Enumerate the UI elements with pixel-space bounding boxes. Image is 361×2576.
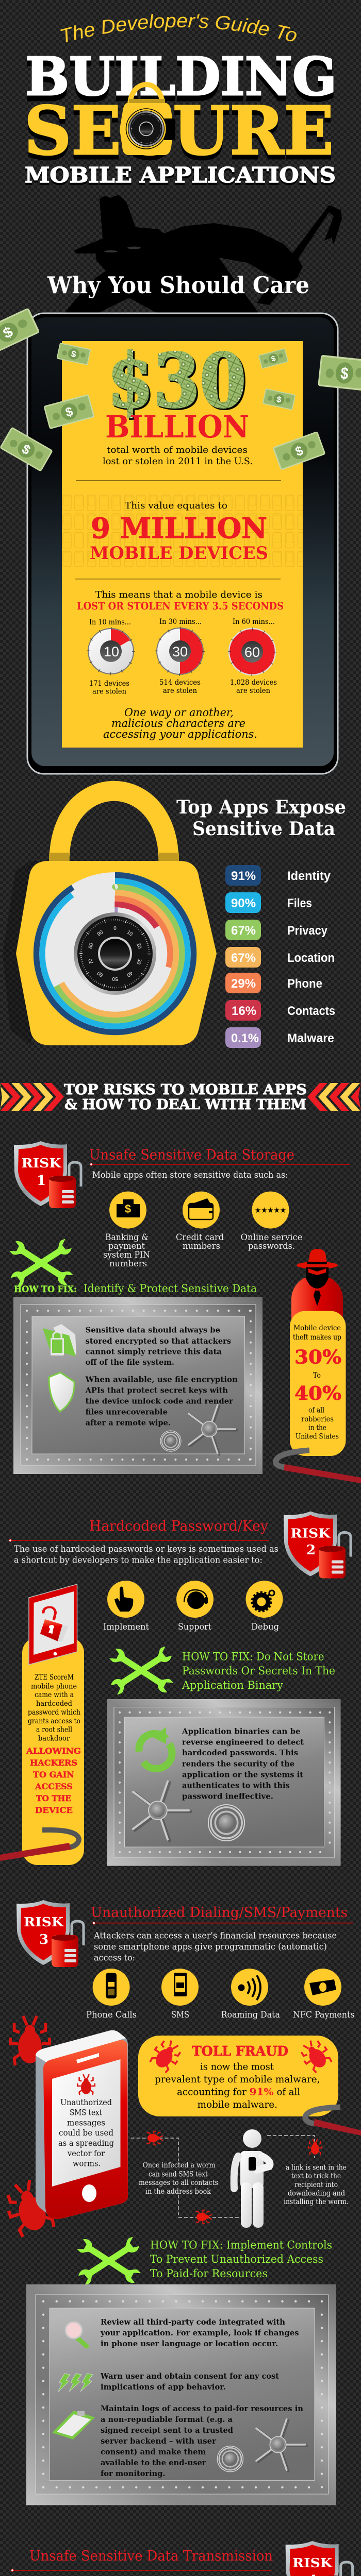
text: vault 3: signed receipt sent to a trusted	[101, 2426, 233, 2435]
flying bills: $	[70, 349, 77, 360]
text: unauthorized sms	[58, 2097, 114, 2168]
text: vault 3: Review all third-party code integrated with	[101, 2317, 285, 2327]
banner title	[64, 1082, 307, 1113]
chevrons right	[307, 1083, 361, 1111]
heading: how to fix 1	[14, 1282, 257, 1295]
chart: big padlock radial chart: 70	[88, 958, 95, 965]
text: allowing hackers: ALLOWING	[26, 1746, 81, 1756]
icon: big bugs	[2, 2016, 59, 2239]
heading: how to fix 3: HOW TO FIX: Implement Controls	[150, 2239, 332, 2251]
text: vault 3: for monitoring.	[101, 2469, 165, 2478]
panel: vault door 2	[107, 1699, 341, 1866]
icon: vault dial	[208, 1805, 244, 1841]
callout: toll fraud	[138, 2036, 338, 2116]
text: allowing hackers: TO GAIN	[33, 1770, 74, 1780]
heading: how to fix 3	[150, 2239, 332, 2280]
text: vault 3: Warn user and obtain consent for any cost	[100, 2371, 279, 2381]
text: a link is sent: text to trick the	[291, 2172, 341, 2180]
heading: risk 3: Unauthorized Dialing/SMS/Payments	[91, 1905, 348, 1921]
callout: theft stat: theft makes up	[293, 1333, 341, 1342]
text: lost or stolen: LOST OR STOLEN EVERY 3.5 SECONDS	[77, 600, 284, 612]
icon: bug on screen	[77, 2074, 95, 2095]
text: total worth: total worth of mobile devices	[107, 445, 248, 455]
title: The Developer's Guide To: The Developer's Guide To	[60, 13, 297, 42]
icon: banking	[109, 1192, 146, 1229]
chart: big padlock radial chart: 60	[96, 970, 104, 978]
chart: big padlock radial chart: 80	[88, 942, 95, 950]
badge: risk 3	[17, 1900, 84, 1967]
banner title: TOP RISKS TO MOBILE APPS	[64, 1082, 307, 1098]
label: credit card: Credit card	[176, 1232, 224, 1242]
badge: risk 1	[14, 1141, 81, 1208]
callout: toll fraud: prevalent type of mobile malware,	[155, 2074, 320, 2085]
label: credit card: numbers	[183, 1241, 220, 1251]
text: unauthorized sms: vector for	[67, 2148, 105, 2158]
number: 9 million: 9 MILLION	[91, 512, 267, 545]
icon: wrenches	[76, 2236, 141, 2286]
callout: toll fraud: accounting for	[177, 2087, 247, 2098]
timer: 60 minutes: 60	[244, 645, 260, 660]
title: Mobile Applications: MOBILE APPLICATIONS	[25, 163, 336, 188]
timer: 10 minutes: 10	[104, 644, 119, 659]
flying bills: $	[340, 364, 349, 383]
callout: ZTE backdoor	[0, 1584, 84, 1865]
labels: implement support debug: Support	[178, 1622, 211, 1632]
callout: toll fraud: is now the most	[200, 2061, 274, 2072]
text: allowing hackers	[26, 1746, 81, 1815]
labels: implement support debug	[103, 1622, 279, 1632]
text: ZTE: backdoor	[38, 1734, 70, 1742]
text: This value equates to: This value equates to	[125, 500, 227, 511]
panel: big red phone	[36, 2030, 128, 2219]
text: vault 3: in phone user language or location occur.	[101, 2339, 278, 2348]
text: vault 2: Application binaries can be	[182, 1726, 301, 1736]
title: Building: BUILDING	[25, 46, 337, 107]
icon: crowbar 1	[276, 1450, 361, 1483]
text: vault 3: available to the end-user	[101, 2458, 207, 2467]
icon: small bugs	[146, 2131, 322, 2224]
risk 3 section	[2, 1900, 361, 2505]
callout: toll fraud: TOLL FRAUD	[192, 2044, 288, 2059]
callout: theft stat: Mobile device	[293, 1324, 341, 1332]
chart: big padlock radial chart: 30	[135, 958, 142, 965]
badge: risk 3: 3	[39, 1932, 48, 1947]
text: ZTE	[28, 1673, 80, 1742]
label: online passwords: passwords.	[248, 1241, 295, 1251]
callout: toll fraud: mobile malware.	[198, 2099, 277, 2110]
text: a link is sent: recipient into	[294, 2181, 338, 2189]
heading: risk 1: Unsafe Sensitive Data Storage	[89, 1147, 294, 1163]
text: this means: This means that a mobile device is	[95, 589, 262, 600]
text: vault 2: renders the security of the	[182, 1759, 294, 1769]
text: a link is sent	[284, 2163, 349, 2206]
labels: access types: Phone Calls	[86, 2010, 137, 2020]
text: vault 1: files unrecoverable	[86, 1408, 168, 1417]
padlock body	[16, 861, 217, 1045]
icon: nfc payments	[304, 1969, 341, 2006]
label: online passwords: Online service	[240, 1232, 302, 1242]
flying bills: $	[276, 395, 282, 405]
callout: theft stat: 30%	[294, 1347, 341, 1368]
text: a link is sent: downloading and	[288, 2190, 345, 2198]
icon: green folder	[43, 1324, 76, 1357]
text: vault 3: implications of app behavior.	[101, 2382, 226, 2392]
labels: access types	[86, 2010, 355, 2020]
heading: Top Apps Expose Sensitive Data	[176, 796, 346, 840]
icon: wrenches	[109, 1646, 174, 1696]
heading: Why You Should Care: Why You Should Care	[47, 272, 309, 299]
text: one way or another: malicious characters are	[111, 717, 245, 730]
icon: credit card	[183, 1192, 220, 1229]
text: unauthorized sms: as a spreading	[58, 2138, 114, 2148]
phone glass	[31, 317, 334, 766]
text: vault 1: stored encrypted so that attackers	[86, 1336, 231, 1346]
text: one way or another: One way or another,	[124, 706, 234, 719]
text: vault 1: When available, use file encryption	[85, 1375, 238, 1384]
icon: green shield	[49, 1372, 74, 1412]
text: one way or another: accessing your applications.	[103, 728, 257, 740]
icon: sms	[161, 1969, 199, 2006]
callout: toll fraud: of all	[277, 2087, 300, 2098]
panel: vault door 1	[13, 1297, 262, 1474]
text: risk 1 intro: Mobile apps often store sensitive data such as:	[92, 1170, 288, 1180]
text: a link is sent: installing the worm.	[284, 2198, 349, 2206]
icon: phone calls	[93, 1969, 130, 2006]
text: unauthorized sms: messages	[67, 2118, 105, 2128]
legend: Malware	[287, 1031, 334, 1045]
text: ZTE: ZTE ScoreM	[35, 1673, 74, 1682]
badge: risk 2	[284, 1512, 351, 1579]
heading: how to fix 2: Passwords Or Secrets In The	[182, 1665, 335, 1677]
chart: big padlock radial chart: 10	[126, 929, 134, 938]
text: ZTE: grants access to	[28, 1717, 80, 1725]
thief silhouette	[64, 195, 342, 313]
text: unauthorized sms: worms.	[73, 2159, 101, 2168]
phones pattern	[62, 495, 303, 567]
text: ZTE: hardcoded	[36, 1700, 72, 1708]
chart: big padlock radial chart	[3, 791, 217, 1045]
label: banking: system PIN	[103, 1250, 150, 1260]
text: ZTE: a root shell	[36, 1726, 72, 1734]
timer: 30 minutes: 30	[172, 644, 188, 659]
callout: theft stat: in the	[308, 1424, 326, 1432]
timer: 30 minutes	[157, 618, 203, 695]
text: once infected: Once infected a worm	[142, 2161, 216, 2170]
text: allowing hackers: ACCESS	[35, 1782, 73, 1791]
text: vault 3: consent) and make them	[101, 2447, 206, 2456]
text: ZTE: mobile phone	[31, 1683, 77, 1691]
icon: vault dial	[217, 2446, 243, 2472]
text: vault 1: Sensitive data should always be	[86, 1325, 220, 1334]
text: unauthorized sms: Unauthorized	[60, 2097, 112, 2107]
banner title: & HOW TO DEAL WITH THEM	[64, 1097, 306, 1113]
timer: 30 minutes: are stolen	[163, 687, 197, 695]
icon: roaming data	[231, 1969, 268, 2006]
legend: 29%	[231, 977, 256, 991]
heading: risk 4: Unsafe Sensitive Data Transmission	[29, 2548, 273, 2564]
callout: theft stat: robberies	[301, 1415, 334, 1423]
text: once infected: can send SMS text	[149, 2170, 208, 2178]
icon: implement	[107, 1581, 144, 1618]
text: vault 3: Maintain logs of access to paid-for resources in	[101, 2404, 303, 2413]
timer: 10 minutes: In 10 mins...	[89, 618, 131, 626]
legend: 0.1%	[231, 1031, 259, 1045]
text: vault 2: hardcoded passwords. This	[182, 1748, 298, 1757]
text: allowing hackers: HACKERS	[30, 1758, 77, 1768]
timer: 30 minutes: 514 devices	[159, 679, 201, 687]
text: vault 2: application or the systems it	[182, 1770, 303, 1779]
text: risk 2 intro	[14, 1544, 278, 1565]
icon: sync arrows	[139, 1727, 172, 1769]
heading: how to fix 1: Identify & Protect Sensitive Data	[84, 1282, 257, 1295]
banner: top risks	[0, 1082, 361, 1113]
icon: banking: $	[125, 1202, 131, 1215]
icon: hacked tablet	[29, 1584, 77, 1665]
label: credit card	[176, 1232, 224, 1251]
callout: theft stat: 40%	[294, 1383, 341, 1404]
badge: risk 2: 2	[306, 1543, 316, 1558]
labels: implement support debug: Debug	[251, 1622, 279, 1632]
combination dial	[74, 912, 156, 995]
chevrons left	[1, 1083, 64, 1111]
icon: password stars: ★★★★★	[255, 1206, 286, 1215]
text: allowing hackers: DEVICE	[35, 1805, 73, 1815]
icon: red hacker	[291, 1249, 343, 1319]
text: vault 3: a non-repudiable format (e.g. a	[101, 2415, 233, 2424]
timer: 10 minutes	[88, 618, 134, 696]
text: risk 3 intro	[93, 1931, 337, 1963]
icon: vault wheel	[189, 1405, 237, 1454]
number: $30 built from bills: $30	[107, 337, 246, 424]
flying bills: $	[270, 354, 276, 364]
text: a link is sent: a link is sent in the	[286, 2163, 347, 2172]
chart: big padlock radial chart: 20	[135, 942, 142, 950]
callout: theft stat: of all	[308, 1406, 324, 1415]
badge: risk 2: RISK	[290, 1526, 331, 1540]
timer: 10 minutes: 171 devices	[89, 680, 129, 688]
badge: risk 3: RISK	[24, 1914, 64, 1929]
flying bills: $	[19, 442, 33, 457]
title block	[24, 13, 337, 188]
chart: big padlock radial chart: 90	[96, 929, 105, 937]
labels: implement support debug: Implement	[103, 1622, 149, 1632]
chart: big padlock radial chart: 50	[112, 976, 118, 981]
callout: theft stat	[290, 1311, 346, 1456]
heading: how to fix 2	[182, 1650, 335, 1691]
heading: Top Apps Expose Sensitive Data: Sensitive Data	[192, 818, 335, 840]
text: vault 2: authenticates to with this	[182, 1781, 290, 1790]
labels: access types: Roaming Data	[221, 2010, 280, 2020]
callout: theft stat: To	[313, 1371, 321, 1380]
text: unauthorized sms: could be used	[59, 2128, 113, 2138]
icon: wrenches	[9, 1238, 74, 1288]
chart: big padlock radial chart: 0	[113, 926, 117, 931]
heading: how to fix 3: To Prevent Unauthorized Access	[150, 2253, 323, 2265]
text: vault 1: after a remote wipe.	[86, 1418, 171, 1427]
text: ZTE: came with a	[35, 1691, 74, 1699]
text: risk 3 intro: access to:	[94, 1953, 135, 1963]
badge: risk 1: RISK	[22, 1156, 62, 1171]
icon: support	[176, 1581, 214, 1618]
radial rings	[36, 875, 194, 1032]
text: vault 2: reverse engineered to detect	[182, 1737, 304, 1747]
text: total worth: lost or stolen in 2011 in the U.S.	[103, 456, 253, 467]
label: online passwords	[240, 1232, 302, 1251]
flying bills	[0, 309, 361, 471]
icon: crowbar 3	[305, 2107, 361, 2136]
legend: Phone	[287, 977, 322, 991]
text: vault 3: server backend – with user	[101, 2436, 217, 2446]
icon: debug gears	[245, 1581, 283, 1618]
text: vault 1: cannot simply retrieve this data	[86, 1347, 222, 1357]
panel: phone with stats	[27, 313, 338, 774]
legend: Identity	[287, 869, 331, 883]
heading: risk 2: Hardcoded Password/Key	[89, 1518, 269, 1534]
label: banking	[103, 1232, 150, 1268]
text: ZTE: password which	[28, 1708, 80, 1717]
legend: Location	[287, 951, 335, 965]
timer: 60 minutes: 1,028 devices	[230, 679, 277, 687]
flying bills: $	[293, 443, 305, 459]
text: vault 1: APIs that protect secret keys with	[85, 1386, 228, 1395]
text: once infected: in the address book	[145, 2188, 211, 2196]
text: vault 1: the device unlock code and render	[86, 1396, 234, 1405]
icon: vault wheel	[133, 1782, 191, 1841]
icon: password stars	[252, 1192, 289, 1229]
heading: how to fix 2: HOW TO FIX: Do Not Store	[182, 1650, 324, 1663]
text: vault 1: off of the file system.	[86, 1358, 174, 1367]
text: vault 1	[85, 1325, 238, 1427]
timer: 60 minutes	[229, 618, 277, 695]
timer: 30 minutes: In 30 mins...	[159, 618, 202, 626]
badge: risk 1: 1	[37, 1173, 46, 1189]
text: once infected: messages to all contacts	[139, 2179, 218, 2187]
heading: how to fix 1: HOW TO FIX:	[14, 1284, 77, 1295]
callout: theft stat: United States	[296, 1433, 339, 1441]
legend: 67%	[231, 924, 256, 938]
text: one way or another	[103, 706, 257, 740]
label: banking: numbers	[109, 1259, 147, 1268]
timer: 10 minutes: are stolen	[92, 687, 126, 696]
yellow screen	[62, 341, 303, 748]
badge: risk 4	[286, 2541, 353, 2576]
labels: access types: SMS	[171, 2010, 189, 2020]
text: risk 2 intro: The use of hardcoded passwords or keys is sometimes used as	[14, 1544, 278, 1554]
legend: Files	[287, 896, 312, 910]
heading: Top Apps Expose Sensitive Data: Top Apps Expose	[176, 796, 346, 818]
label: banking: Banking &	[105, 1232, 149, 1242]
phone frame	[27, 313, 338, 774]
callout: toll fraud: 91%	[250, 2087, 273, 2098]
flying bills: $	[64, 404, 75, 420]
number: billion: BILLION	[105, 409, 249, 445]
legend: 16%	[232, 1004, 256, 1018]
text: risk 3 intro: Attackers can access a user's financial resources because	[93, 1931, 337, 1941]
legend: 91%	[231, 869, 256, 883]
heading: how to fix 3: To Paid-for Resources	[150, 2267, 268, 2280]
legend: 90%	[231, 896, 256, 910]
legend: Contacts	[287, 1004, 335, 1018]
text: unauthorized sms: SMS text	[70, 2108, 102, 2117]
flying bills: $	[1, 324, 15, 342]
risk 4 section	[10, 2541, 357, 2576]
panel: vault door 3	[26, 2284, 336, 2505]
icon: crowbar 2	[0, 1830, 79, 1861]
badge: risk 4: RISK	[292, 2555, 333, 2570]
icon: padlock in title	[120, 84, 175, 155]
title: Secure: SECURE	[24, 92, 334, 170]
padlock shackle	[59, 791, 169, 861]
risk 1 section	[9, 1141, 361, 1483]
icon: magnifier	[65, 2322, 87, 2346]
legend	[225, 865, 335, 1048]
flow: worm spread dashed lines	[131, 2136, 315, 2217]
timer: 60 minutes: are stolen	[236, 687, 270, 695]
label: banking: payment	[108, 1241, 145, 1251]
icon: clipboard	[52, 2411, 95, 2439]
text: allowing hackers: TO THE	[36, 1793, 71, 1803]
labels: access types: NFC Payments	[293, 2010, 355, 2020]
icon: lightning bolts	[58, 2374, 93, 2392]
icon: vault dial	[160, 1431, 181, 1451]
text: vault 3	[100, 2317, 303, 2478]
text: mobile devices: MOBILE DEVICES	[90, 543, 268, 564]
text: total worth	[103, 445, 253, 467]
timer: 60 minutes: In 60 mins...	[233, 618, 275, 626]
text: once infected	[139, 2161, 218, 2196]
legend: 67%	[231, 951, 256, 965]
text: vault 2: password ineffective.	[182, 1791, 273, 1801]
heading: how to fix 2: Application Binary	[182, 1679, 283, 1691]
chart: big padlock radial chart: 40	[125, 970, 134, 978]
icon: vault wheel	[256, 2419, 307, 2471]
text: vault 2	[182, 1726, 304, 1801]
legend: Privacy	[287, 924, 328, 938]
icon: person with phone	[234, 2129, 270, 2228]
text: risk 3 intro: some smartphone apps give programmatic (automatic)	[94, 1942, 327, 1952]
text: vault 3: your application. For example, look if changes	[100, 2328, 299, 2337]
text: risk 2 intro: a shortcut by developers to make the application easier to:	[14, 1555, 262, 1565]
risk 2 section	[0, 1512, 351, 1866]
